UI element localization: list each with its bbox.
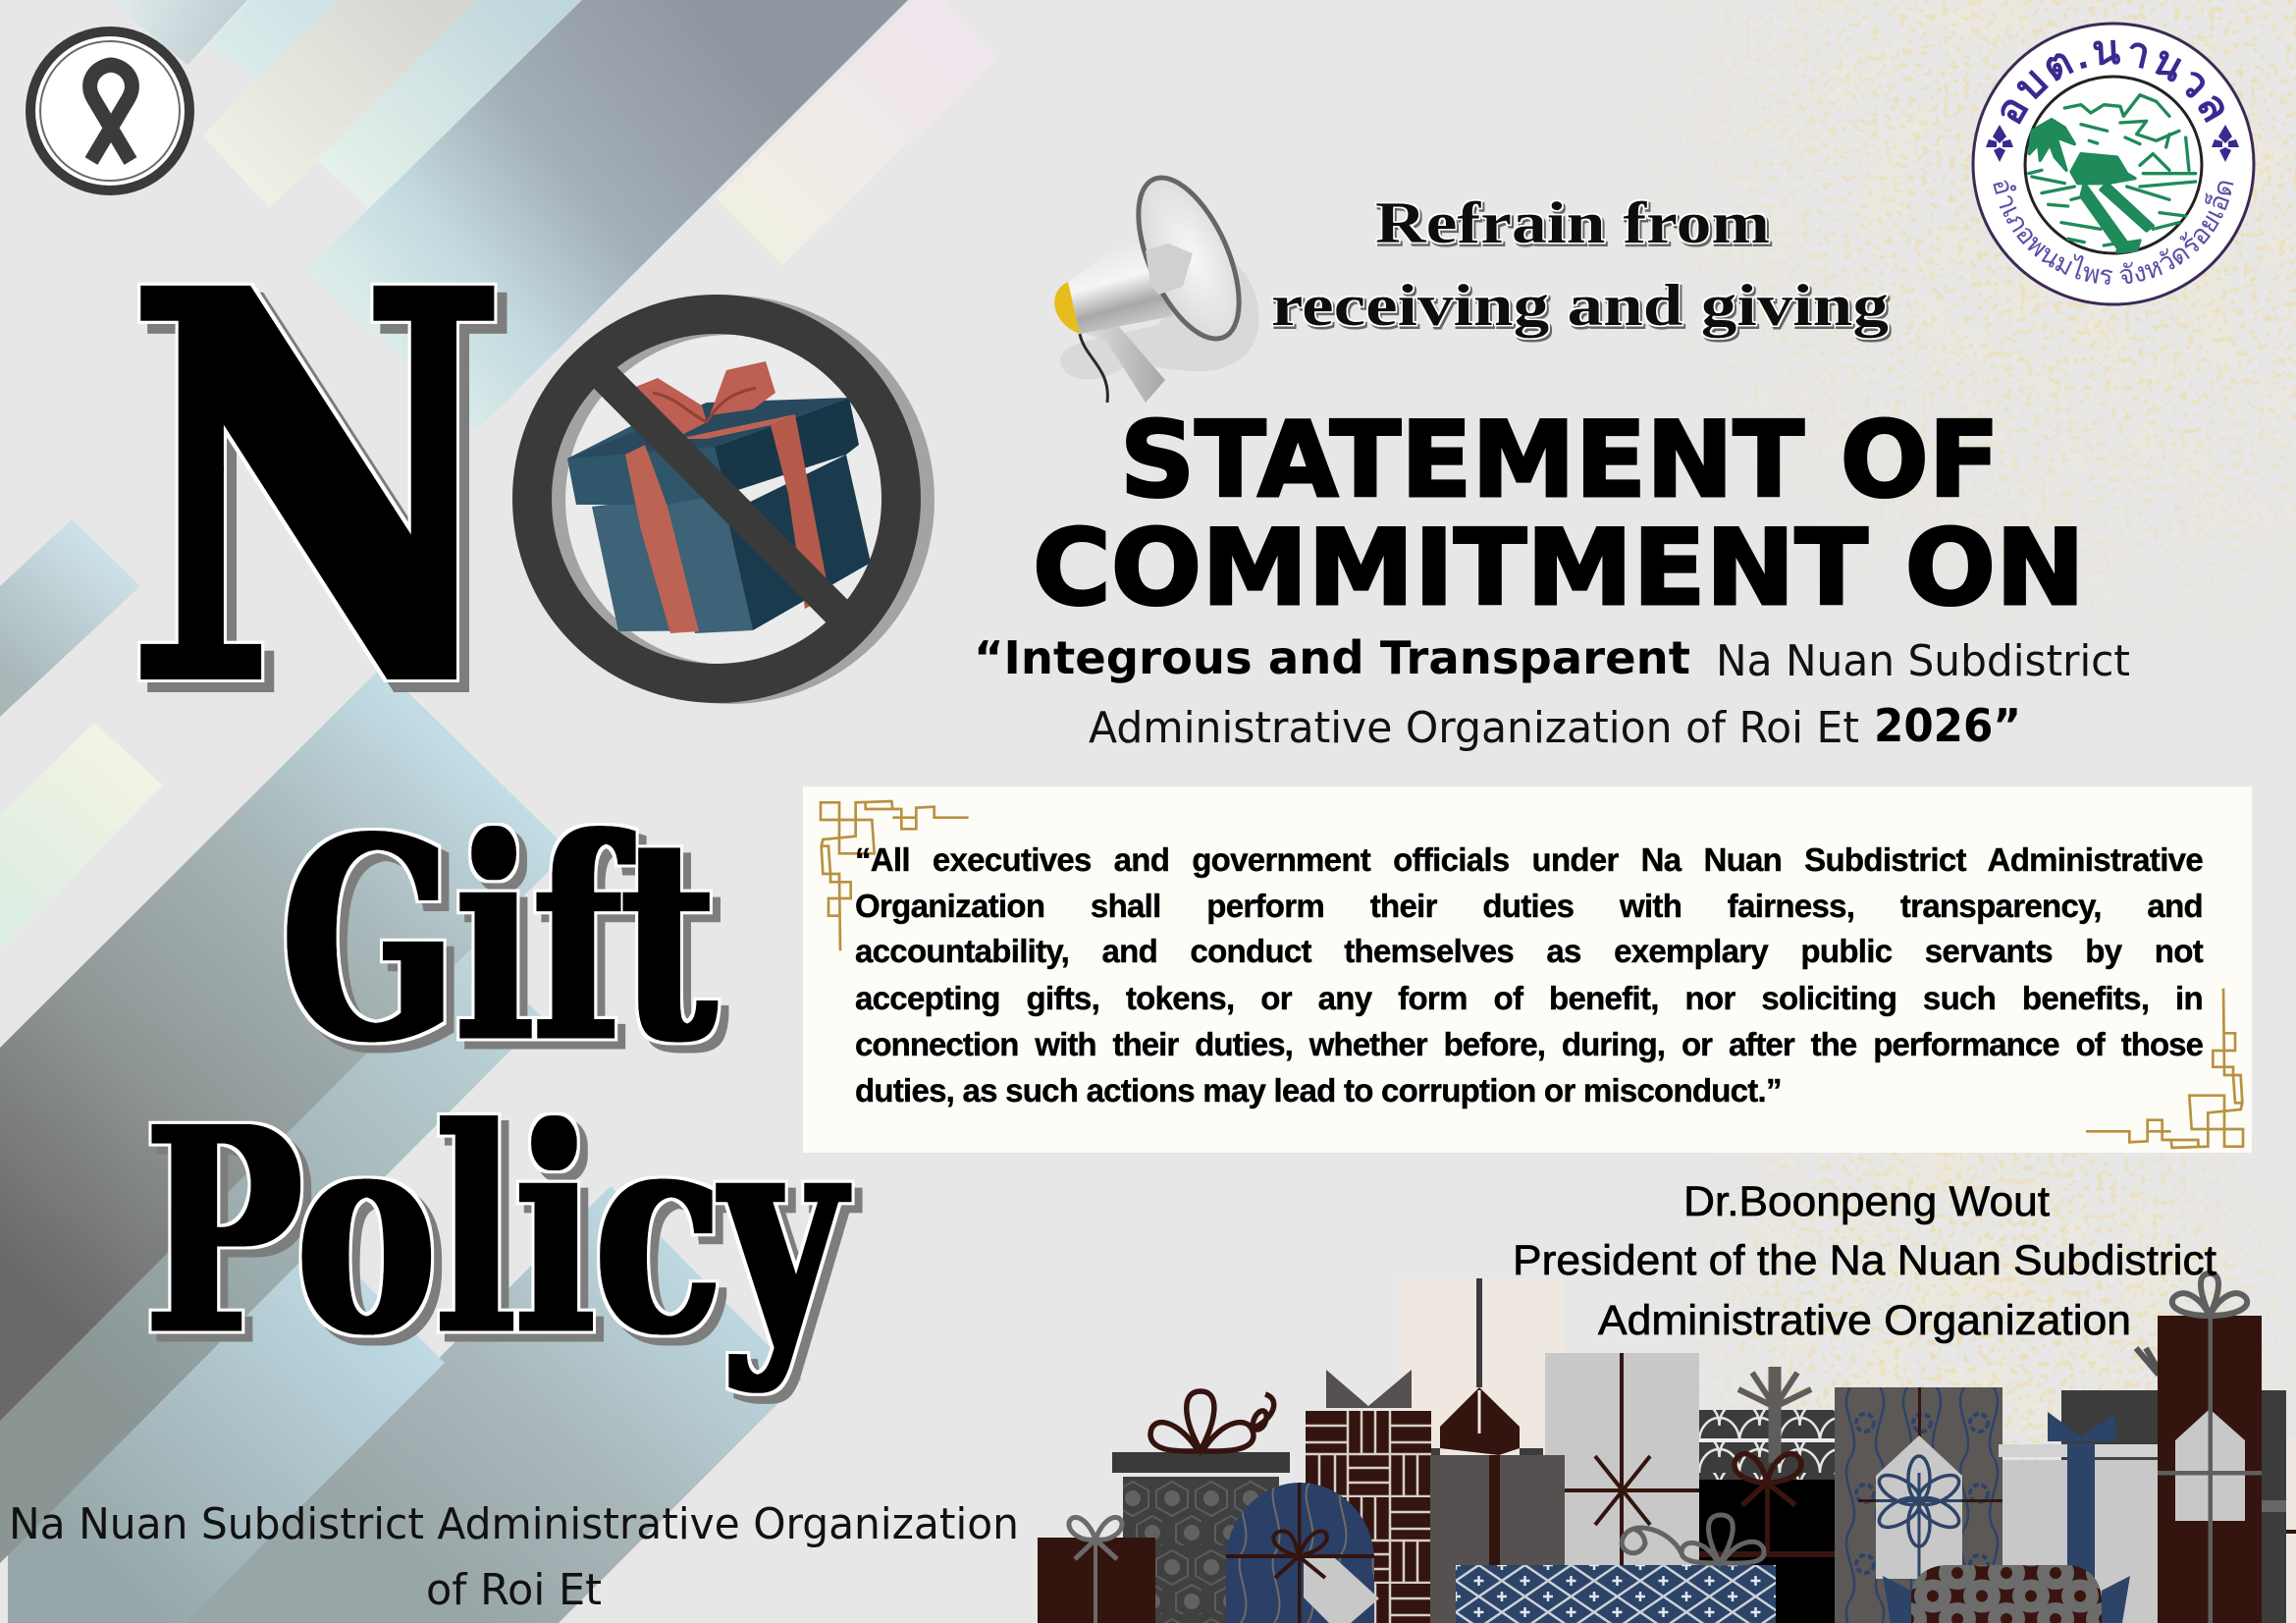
statement text	[855, 841, 2204, 1109]
heading letter N: N	[132, 175, 502, 804]
seal landscape	[2029, 95, 2196, 252]
logo seal	[1971, 22, 2256, 306]
gift boxes illustration	[1038, 1273, 2296, 1623]
seal top text: อบต.นานวล	[2001, 39, 2224, 125]
heading: Policy: Policy	[145, 1067, 849, 1396]
gift: navy diamond box	[1456, 1565, 1776, 1623]
background diagonal bands top	[113, 0, 996, 431]
icon: prohibited gift	[532, 314, 915, 684]
gift: tall cream	[1399, 1278, 1564, 1455]
gift: patterned blue gray box	[1835, 1387, 2002, 1623]
subheading: refrain from: Refrain from	[1375, 190, 1770, 255]
gift: silver box with blue ribbon	[1999, 1412, 2164, 1623]
gift: maroon small left	[1038, 1477, 1279, 1623]
signature name: Dr.Boonpeng Wout	[1683, 1178, 2050, 1225]
statement text: connection with their duties, whether before, during, or after the performance of those	[855, 1026, 2203, 1062]
prohibition ring	[532, 314, 901, 683]
signature role line 2: Administrative Organization	[1598, 1297, 2131, 1344]
prohibition slash	[601, 373, 842, 617]
footer organization line 1: Na Nuan Subdistrict Administrative Organization	[9, 1499, 1019, 1549]
gift: gray hexagon box lid and bow	[1112, 1391, 1290, 1473]
background diagonal bands lower left	[0, 519, 802, 1623]
seal bottom text: อำเภอพนมไพร จังหวัดร้อยเอ็ด	[1993, 180, 2234, 285]
statement text: duties, as such actions may lead to corruption or misconduct.”	[855, 1072, 1782, 1109]
gift: light gray star ribbon	[1545, 1353, 1699, 1623]
statement text: Organization shall perform their duties with fairness, transparency, and	[855, 888, 2203, 924]
subtitle line 1 regular: Na Nuan Subdistrict	[1716, 636, 2130, 686]
statement text: “All executives and government officials under Na Nuan Subdistrict Administrative	[855, 841, 2203, 878]
title: statement of: STATEMENT OF	[1120, 400, 2000, 520]
subheading: receiving and giving: receiving and giving	[1271, 273, 1889, 338]
gift: dark back box	[2061, 1348, 2296, 1623]
sign shadow ring	[546, 315, 915, 684]
panel: statement background	[803, 786, 2252, 1153]
gift: gray ribbon bow	[1622, 1515, 1764, 1563]
ornament: bottom-right gold corner	[2086, 989, 2243, 1148]
gift: blue round	[1226, 1483, 1379, 1623]
footer organization line 2: of Roi Et	[426, 1565, 602, 1615]
gift box	[567, 361, 871, 633]
gift: candy	[1883, 1565, 2130, 1623]
subtitle line 2 regular: Administrative Organization of Roi Et	[1089, 703, 1859, 753]
gold speckle texture	[1643, 0, 2296, 1460]
icon: black mourning ribbon badge	[26, 27, 194, 195]
gift: brick box	[1306, 1370, 1431, 1623]
icon: megaphone	[1054, 163, 1259, 403]
statement text: accountability, and conduct themselves as exemplary public servants by not	[855, 933, 2203, 969]
subtitle line 1 bold: “Integrous and Transparent	[974, 631, 1690, 684]
signature role line 1: President of the Na Nuan Subdistrict	[1513, 1237, 2216, 1284]
gift: scallop box	[1699, 1367, 1835, 1480]
heading: Gift: Gift	[282, 779, 717, 1103]
gift: tall maroon box	[2158, 1273, 2262, 1623]
gift: black box	[1699, 1454, 1857, 1623]
seal stars	[1986, 125, 2239, 162]
ornament: top-left gold corner	[821, 801, 969, 950]
title: commitment on: COMMITMENT ON	[1033, 508, 2085, 628]
statement text: accepting gifts, tokens, or any form of benefit, nor soliciting such benefits, in	[855, 980, 2203, 1016]
subtitle year: 2026”	[1874, 699, 2021, 752]
megaphone shadow	[1060, 250, 1259, 379]
gift: gray box	[1430, 1387, 1565, 1623]
